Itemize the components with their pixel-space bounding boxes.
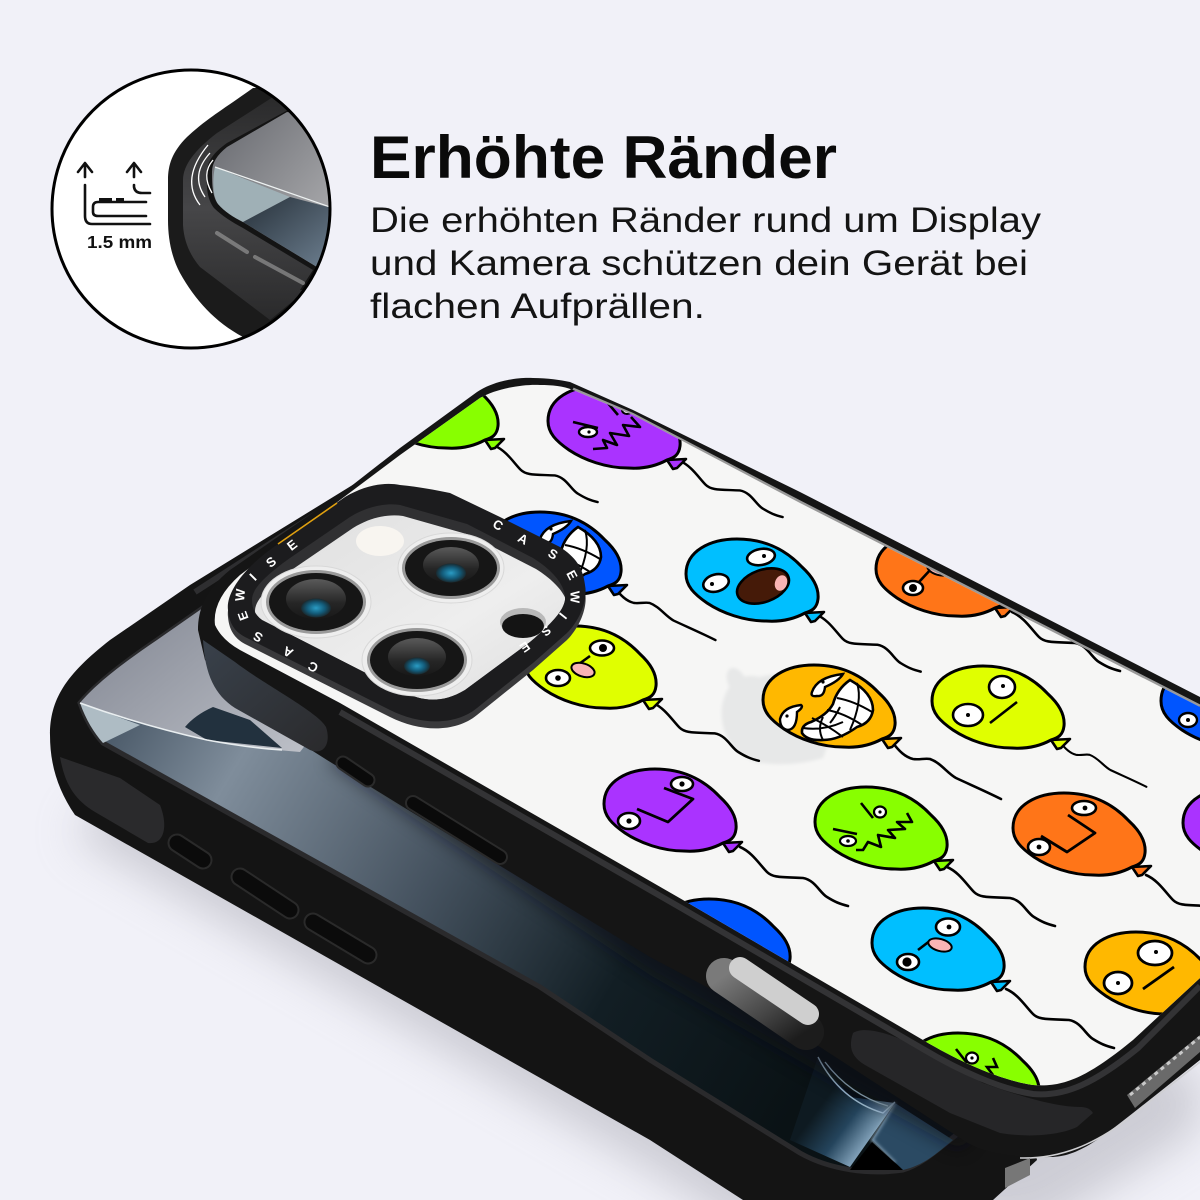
camera module: I bbox=[246, 570, 260, 584]
balloon: purple square nose bbox=[604, 769, 848, 906]
screen bbox=[80, 540, 1010, 1172]
lens 2 bbox=[398, 533, 504, 603]
camera module: E bbox=[563, 568, 581, 583]
highlight strip along frame bbox=[340, 712, 1200, 1094]
camera ring with logo letters bbox=[228, 484, 586, 721]
balloon: blue bottom bbox=[684, 898, 792, 963]
balloon: orange clipped by frame bbox=[876, 534, 1120, 671]
balloon: green bottom bbox=[922, 1032, 1040, 1086]
balloon: yellow-green flat mouth bbox=[932, 666, 1146, 787]
camera module: E bbox=[284, 536, 300, 554]
camera module: S bbox=[538, 622, 554, 640]
camera module: I bbox=[556, 610, 570, 622]
camera module: S bbox=[545, 545, 561, 563]
charging port bbox=[724, 976, 806, 1032]
apple logo ghost bbox=[722, 668, 826, 764]
camera module: S bbox=[250, 628, 265, 646]
lower phone side buttons bbox=[177, 843, 368, 955]
balloon: cyan tongue bbox=[872, 908, 1114, 1048]
camera module: C bbox=[305, 658, 321, 676]
inset circle: raised edge close-up bbox=[52, 70, 340, 348]
camera module bbox=[228, 484, 586, 728]
upper phone: case frame bbox=[198, 378, 1200, 1188]
camera module: A bbox=[280, 643, 296, 661]
flash bbox=[356, 526, 404, 556]
balloon: cyan open mouth bbox=[686, 539, 921, 672]
icon label: 1.5 mm bbox=[87, 232, 152, 252]
translucent corner pad bbox=[60, 757, 164, 843]
balloon: amber flat mouth bbox=[1085, 932, 1200, 1015]
body text: flachen Aufprällen. bbox=[370, 287, 705, 326]
camera ring lip bbox=[228, 491, 586, 728]
screen reflection: grey upper area bbox=[80, 540, 340, 752]
lower phone: bumper bbox=[50, 470, 1037, 1200]
balloon: blue at right edge bbox=[1160, 688, 1200, 742]
camera module: S bbox=[263, 553, 279, 571]
balloon: purple angry bbox=[548, 386, 783, 517]
body text: und Kamera schützen dein Gerät bei bbox=[370, 244, 1028, 283]
balloon: purple at right edge bbox=[1182, 794, 1200, 851]
icon: 1.5 mm raised lip diagram bbox=[78, 163, 152, 252]
lens 3 bbox=[362, 624, 472, 696]
top rim highlight bbox=[573, 389, 1200, 706]
camera glass bbox=[252, 504, 565, 700]
balloon: orange square nose bbox=[1012, 792, 1200, 907]
bottom silver edge bbox=[1020, 1062, 1200, 1158]
screen reflection: dark wedge bbox=[185, 707, 282, 748]
title: Erhöhte Ränder bbox=[370, 124, 837, 191]
phone shadow on the ground bbox=[73, 700, 1200, 1200]
speaker grille bbox=[1127, 1035, 1200, 1108]
clear case back with balloon print bbox=[214, 384, 1200, 1086]
body text: Die erhöhten Ränder rund um Display bbox=[370, 201, 1042, 240]
balloon: green angry bbox=[815, 787, 1055, 926]
lens 1 bbox=[261, 566, 371, 638]
screen lower-right light streaks bbox=[790, 1057, 953, 1170]
balloon: blue grin behind camera bbox=[489, 512, 715, 640]
camera module: E bbox=[517, 638, 533, 656]
lidar sensor bbox=[500, 608, 546, 638]
camera module: A bbox=[515, 530, 531, 548]
power button bbox=[413, 803, 500, 857]
camera module: W bbox=[232, 588, 248, 602]
balloon: green top-left bbox=[415, 395, 599, 504]
camera module: E bbox=[234, 609, 252, 623]
balloon: amber grin bbox=[763, 665, 1001, 799]
translucent pad at bottom corner bbox=[851, 1030, 1093, 1135]
mute switch bbox=[343, 763, 368, 780]
translucent pad near camera bbox=[203, 640, 328, 751]
shadow cast by upper phone onto screen bbox=[327, 700, 1010, 1150]
screen reflection: pale triangle bbox=[80, 703, 140, 743]
balloon: yellow-green tongue bbox=[524, 626, 759, 761]
camera module: C bbox=[490, 516, 506, 534]
body text bbox=[370, 201, 1042, 326]
camera module: W bbox=[568, 591, 582, 604]
